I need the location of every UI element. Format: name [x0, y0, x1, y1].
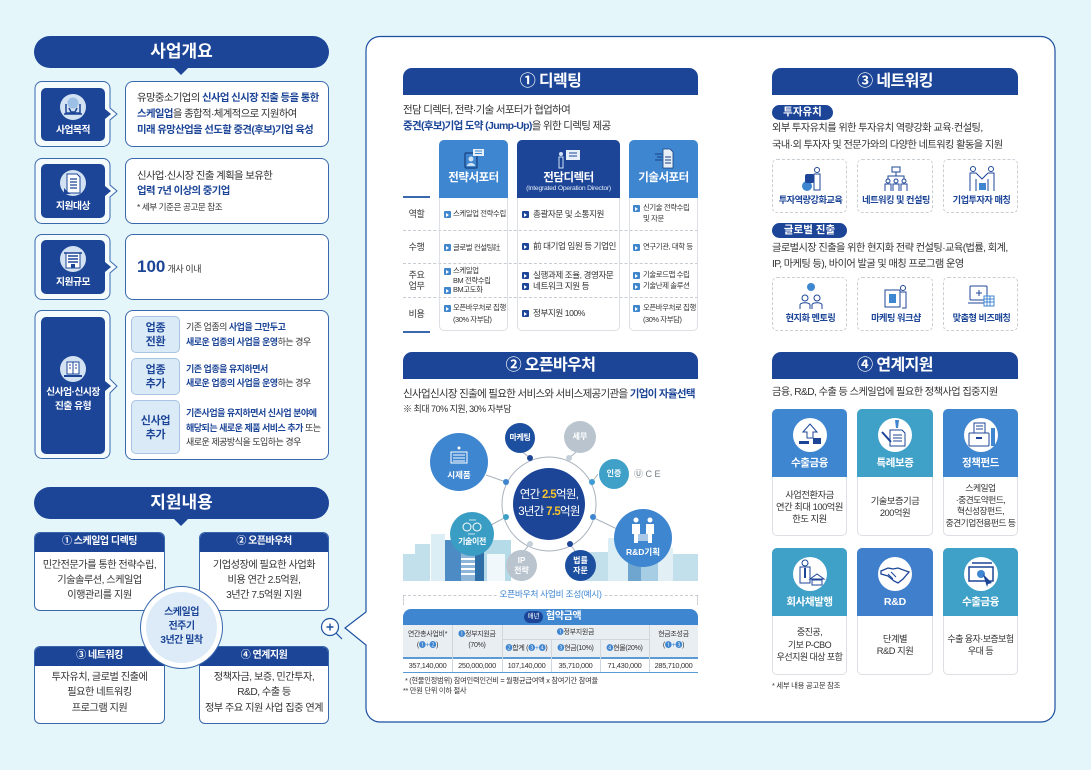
bubble: 기술이전 [450, 512, 494, 556]
table: 협약금액: (❶+❸) [663, 642, 684, 649]
table: 협약금액: ❷합계 (❸+❹) [506, 645, 547, 652]
card: 정책펀드: 중견기업전용펀드 등 [946, 518, 1015, 528]
table: 협약금액: 107,140,000 [508, 661, 545, 670]
table: 디렉팅 row labels: 주요 [409, 270, 424, 280]
bubble: 법률자문 [565, 550, 596, 581]
panel: 사업목적: 미래 유망산업을 선도할 중견(후보)기업 육성 [137, 125, 313, 136]
card: 맞춤형 비즈매칭: 맞춤형 비즈매칭 [953, 313, 1010, 323]
text: table notes: ** 만원 단위 이하 절사 [403, 686, 466, 695]
column: 전담디렉터: 前 대기업 임원 등 기업인 [533, 241, 616, 251]
panel: 신사업·신시장 진출 유형: 신사업·신시장 [46, 387, 100, 398]
column: 전담디렉터: (Integrated Operation Director) [526, 185, 611, 192]
card: 수출금융 (2): 우대 등 [968, 646, 993, 656]
card: 스케일업 디렉팅: 기술솔루션, 스케일업 [57, 575, 142, 586]
bubble: 시제품: 시제품 [447, 470, 471, 480]
heading: 지원내용: 지원내용 [150, 493, 213, 512]
card: R&D: 단계별 [883, 634, 907, 644]
table: 협약금액 [403, 609, 698, 673]
center bubble: 연간 2.5억원 3년간 7.5억원: 3년간 7.5억원 [518, 506, 580, 518]
panel: 지원대상: 지원대상 [56, 201, 90, 212]
bubble: 세무 [564, 421, 596, 453]
icon: certification marks: Ⓤ C E [634, 469, 661, 479]
tag: 글로벌 진출 [772, 223, 847, 238]
column: 전담디렉터: 전담디렉터 [543, 172, 594, 184]
card: 수출금융 (2): 수출 융자·보증보험 [947, 634, 1014, 644]
table: 디렉팅 row labels [403, 196, 430, 333]
heading: 지원내용 [34, 487, 329, 519]
text: 오픈바우처 intro: ※ 최대 70% 지원, 30% 자부담 [403, 404, 511, 414]
text: 글로벌 진출 description: IP, 마케팅 등), 바이어 발굴 및 매칭 프로그램 운영 [772, 259, 964, 270]
table: 협약금액: ❸현금(10%) [557, 645, 594, 652]
center circle: 스케일업 전주기 3년간 밀착: 전주기 [168, 621, 195, 632]
card: 특례보증 [857, 409, 933, 536]
dividers [403, 230, 698, 231]
section 1: 디렉팅 heading [403, 68, 698, 95]
card: 수출금융 (2): 수출금융 [962, 596, 999, 608]
bubble: 기술이전: 기술이전 [458, 537, 486, 546]
section 4: 연계지원 heading: ④ 연계지원 [857, 357, 933, 374]
center circle: 스케일업 전주기 3년간 밀착 [140, 586, 223, 669]
card: 정책펀드: 혁신성장펀드, [957, 506, 1004, 516]
card: 특례보증: 기술보증기금 [871, 496, 919, 506]
card: 회사채발행: 중진공, [797, 627, 822, 637]
section 4: 연계지원 heading [772, 352, 1018, 379]
column: 전략서포터: 오픈바우처로 집행 [453, 303, 506, 312]
column: 전략서포터 [439, 140, 508, 331]
card: 수출금융 [772, 409, 847, 536]
card: 스케일업 디렉팅: ① 스케일업 디렉팅 [62, 536, 137, 547]
table: 협약금액: ❶정부지원금 [557, 629, 594, 636]
panel: 신사업·신시장 진출 유형: 업종 [146, 322, 165, 334]
bubble: 인증: 인증 [607, 469, 621, 478]
heading: 사업개요 [34, 36, 329, 68]
bubble: R&D기획: R&D기획 [626, 547, 660, 557]
section 1: 디렉팅 heading: ① 디렉팅 [520, 73, 581, 90]
card: 마케팅 워크샵 [857, 277, 933, 331]
column: 전담디렉터 [517, 140, 620, 331]
column: 전담디렉터: 실행과제 조율, 경영자문 [533, 270, 613, 280]
column: 전담디렉터: 총괄자문 및 소통지원 [533, 209, 604, 219]
heading: 사업개요: 사업개요 [150, 42, 213, 61]
panel: 신사업·신시장 진출 유형: 새로운 업종의 사업을 운영하는 경우 [186, 337, 311, 347]
card: 오픈바우처: 비용 연간 2.5억원, [228, 575, 300, 586]
text: 투자유치 description: 국내·외 투자자 및 전문가와의 다양한 네트워킹 활동을 지원 [772, 140, 1003, 151]
card: 특례보증: 특례보증 [876, 457, 914, 469]
card: 기업투자자 매칭: 기업투자자 매칭 [953, 195, 1010, 205]
panel: 사업목적 [34, 81, 329, 147]
card: 정책펀드: 정책펀드 [962, 457, 999, 469]
column: 전략서포터: 스케일업 전략수립 [453, 209, 506, 218]
column: 기술서포터: 연구기관, 대학 등 [643, 242, 693, 251]
center circle: 스케일업 전주기 3년간 밀착: 스케일업 [164, 607, 199, 618]
column: 전략서포터: 전략서포터 [448, 172, 499, 184]
text: 투자유치 description [772, 122, 1003, 151]
text: 오픈바우처 intro [403, 388, 695, 414]
text: footnote: * 세부 내용 공고문 참조 [772, 681, 840, 690]
card: 스케일업 디렉팅: 민간전문가를 통한 전략수립, [43, 560, 156, 571]
text: 글로벌 진출 description: 글로벌시장 진출을 위한 현지화 전략 컨설팅·교육(법률, 회계, [772, 243, 1008, 254]
panel: 신사업·신시장 진출 유형: 새로운 제공방식을 도입하는 경우 [186, 437, 301, 447]
column: 기술서포터: 및 자문 [643, 214, 664, 223]
card: 오픈바우처 [199, 532, 329, 611]
text: 오픈바우처 intro: 신사업신시장 진출에 필요한 서비스와 서비스제공기관을 기업이 자율선택 [403, 388, 695, 400]
card: 특례보증: 200억원 [880, 508, 910, 518]
tag: 글로벌 진출: 글로벌 진출 [784, 224, 835, 236]
column: 기술서포터: 신기술 전략수립 [643, 203, 689, 212]
text: table notes [403, 676, 598, 695]
bubble: IP 전략: IP [518, 556, 525, 565]
card: 마케팅 워크샵: 마케팅 워크샵 [871, 313, 921, 323]
card: 회사채발행: 회사채발행 [786, 596, 833, 608]
column: 기술서포터: (30% 자부담) [643, 315, 682, 324]
center circle: 스케일업 전주기 3년간 밀착: 3년간 밀착 [160, 635, 203, 646]
panel: 지원대상 [34, 158, 329, 224]
column: 기술서포터 [629, 140, 698, 331]
table: 협약금액: 357,140,000 [409, 661, 446, 670]
column: 기술서포터: 기술서포터 [638, 172, 689, 184]
panel: 신사업·신시장 진출 유형: 해당되는 새로운 제품 서비스 추가 또는 [186, 423, 320, 433]
text: 연계지원 intro: 금융, R&D, 수출 등 스케일업에 필요한 정책사업 집중지원 [772, 387, 998, 398]
table: 협약금액: 현금조성금 [658, 631, 689, 638]
card: 네트워킹 [34, 646, 165, 724]
card: R&D: R&D 지원 [877, 646, 913, 656]
panel: 사업목적: 유망중소기업의 신사업 신시장 진출 등을 통한 [137, 93, 319, 104]
bubble: IP 전략 [506, 550, 537, 581]
card: 수출금융 (2) [943, 548, 1018, 675]
table: 협약금액: 35,710,000 [558, 661, 592, 670]
card: 네트워킹: 투자유치, 글로벌 진출에 [52, 672, 147, 683]
card: 수출금융: 한도 지원 [792, 514, 827, 524]
panel: 지원규모 [34, 234, 329, 300]
section 3: 네트워킹 heading [772, 68, 1018, 95]
table: 디렉팅 row labels: 역할 [409, 209, 424, 219]
text: 투자유치 description: 외부 투자유치를 위한 투자유치 역량강화 교육·컨설팅, [772, 123, 983, 134]
panel: 신사업·신시장 진출 유형 [34, 310, 329, 460]
text: 디렉팅 intro: 전담 디렉터, 전략·기술 서포터가 협업하여 [403, 104, 570, 116]
panel: 지원규모: 100 개사 이내 [137, 257, 201, 276]
card: 기업투자자 매칭 [943, 159, 1018, 213]
card: 수출금융: 연간 최대 100억원 [776, 502, 843, 512]
table heading: 오픈바우처 사업비 조성(예시) [403, 589, 698, 605]
card: 회사채발행: 기보 P-CBO [788, 640, 831, 650]
panel: 신사업·신시장 진출 유형: 전환 [146, 336, 165, 348]
table: 협약금액: (❶+❷) [417, 642, 438, 649]
card: 수출금융: 사업전환자금 [785, 490, 834, 500]
panel: 지원대상: * 세부 기준은 공고문 참조 [137, 202, 222, 212]
panel: 지원규모: 지원규모 [56, 277, 90, 288]
bubble: R&D기획 [614, 509, 672, 567]
panel: 지원대상: 신사업·신시장 진출 계획을 보유한 [137, 171, 272, 182]
table: 협약금액: 285,710,000 [655, 661, 692, 670]
table: 협약금액: 71,430,000 [608, 661, 642, 670]
column: 기술서포터: 오픈바우처로 집행 [643, 303, 696, 312]
table: 협약금액: 매년 [528, 613, 539, 620]
bubble: IP 전략: 전략 [514, 566, 529, 575]
card: 정책펀드: 스케일업 [965, 483, 996, 493]
card: 연계지원: 정책자금, 보증, 민간투자, [214, 672, 314, 683]
panel: 지원대상: 업력 7년 이상의 중기업 [137, 186, 230, 197]
bubble: 법률자문: 자문 [573, 566, 588, 575]
card: 네트워킹 및 컨설팅 [857, 159, 933, 213]
text: 디렉팅 intro [403, 104, 611, 132]
table: 디렉팅 row labels: 업무 [409, 281, 424, 291]
bubble: 인증 [599, 459, 629, 489]
panel: 신사업·신시장 진출 유형: 신사업 [141, 415, 170, 427]
card: 연계지원: ④ 연계지원 [241, 650, 287, 661]
card: 회사채발행 [772, 548, 847, 675]
center bubble: 연간 2.5억원 3년간 7.5억원 [513, 468, 585, 540]
panel: 신사업·신시장 진출 유형: 기존 업종을 유지하면서 [186, 364, 268, 374]
column: 전략서포터: (30% 자부담) [453, 315, 492, 324]
section 2: 오픈바우처 heading: ② 오픈바우처 [506, 357, 595, 374]
card: R&D: R&D [884, 596, 906, 608]
card: 연계지원: 정부 주요 지원 사업 집중 연계 [205, 703, 323, 714]
panel: 신사업·신시장 진출 유형: 새로운 업종의 사업을 운영하는 경우 [186, 378, 311, 388]
table: 협약금액: 250,000,000 [458, 661, 496, 670]
card: 스케일업 디렉팅 [34, 532, 165, 611]
bubble: 마케팅 [505, 423, 535, 453]
column: 전담디렉터: 네트워크 지원 등 [533, 281, 589, 291]
card: 네트워킹: 필요한 네트워킹 [67, 687, 132, 698]
tag: 투자유치 [772, 105, 833, 120]
card: 현지화 멘토링: 현지화 멘토링 [786, 313, 835, 323]
card: 네트워킹: ③ 네트워킹 [76, 650, 123, 661]
text: 디렉팅 intro: 중견(후보)기업 도약 (Jump-Up)을 위한 디렉팅 제공 [403, 120, 611, 132]
column: 전략서포터: 스케일업 [453, 266, 479, 275]
card: 연계지원: R&D, 수출 등 [237, 687, 291, 698]
section 2: 오픈바우처 heading [403, 352, 698, 379]
card: 회사채발행: 우선지원 대상 포함 [777, 652, 842, 662]
column: 기술서포터: 기술로드맵 수립 [643, 270, 689, 279]
panel: 신사업·신시장 진출 유형: 진출 유형 [55, 401, 91, 412]
table heading: 오픈바우처 사업비 조성(예시): 오픈바우처 사업비 조성(예시) [499, 589, 602, 599]
card: 네트워킹: 프로그램 지원 [72, 703, 127, 714]
card: 스케일업 디렉팅: 이행관리를 지원 [67, 590, 132, 601]
column: 전략서포터: 글로벌 컨설팅社 [453, 243, 500, 252]
panel: 신사업·신시장 진출 유형: 업종 [146, 364, 165, 376]
column: 기술서포터: 기술난제 솔루션 [643, 281, 689, 290]
table: 협약금액: ❶정부지원금 [458, 631, 496, 638]
table: 협약금액: ❹현물(20%) [606, 645, 643, 652]
card: 연계지원 [199, 646, 329, 724]
text: 글로벌 진출 description [772, 242, 1008, 270]
panel: 신사업·신시장 진출 유형: 기존 업종의 사업을 그만두고 [186, 322, 285, 332]
table: 디렉팅 row labels: 수행 [409, 242, 424, 252]
column: 전략서포터: BM고도화 [453, 285, 482, 294]
bubble: 세무: 세무 [573, 432, 587, 441]
card: 정책펀드 [943, 409, 1018, 536]
card: 맞춤형 비즈매칭 [943, 277, 1018, 331]
table: 협약금액: (70%) [468, 642, 486, 649]
panel: 사업목적: 스케일업을 종합적·체계적으로 지원하여 [137, 109, 297, 120]
section 3: 네트워킹 heading: ③ 네트워킹 [857, 73, 933, 90]
tag: 투자유치: 투자유치 [783, 106, 822, 118]
table: 협약금액: 연간총사업비* [408, 631, 447, 638]
bubble: 마케팅: 마케팅 [510, 433, 530, 442]
card: 정책펀드: ·중견도약펀드, [956, 495, 1005, 505]
column: 전담디렉터: 정부지원 100% [533, 308, 585, 318]
panel: 신사업·신시장 진출 유형: 추가 [146, 429, 165, 441]
table: 협약금액: 협약금액 [546, 611, 581, 622]
bubble: 시제품 [430, 433, 488, 491]
card: 오픈바우처: ② 오픈바우처 [236, 536, 292, 547]
card: 수출금융: 수출금융 [791, 457, 828, 469]
icon: magnifier [320, 618, 342, 640]
bubble: 법률자문: 법률 [573, 556, 588, 565]
card: 네트워킹 및 컨설팅: 네트워킹 및 컨설팅 [862, 195, 930, 205]
card: 현지화 멘토링 [772, 277, 847, 331]
card: 오픈바우처: 기업성장에 필요한 사업화 [213, 560, 315, 571]
table: 디렉팅 row labels: 비용 [409, 309, 424, 319]
illustration: city skyline [403, 534, 698, 581]
card: R&D [857, 548, 933, 675]
center bubble: 연간 2.5억원 3년간 7.5억원: 연간 2.5억원, [520, 489, 578, 501]
card: 투자역량강화교육: 투자역량강화교육 [779, 195, 842, 205]
text: table notes: * (현물인정범위) 참여인력인건비 = 월평균급여액 x 참여기간 참여율 [405, 676, 598, 685]
card: 투자역량강화교육 [772, 159, 847, 213]
card: 오픈바우처: 3년간 7.5억원 지원 [226, 590, 302, 601]
panel: 신사업·신시장 진출 유형: 추가 [146, 378, 165, 390]
panel: 사업목적: 사업목적 [56, 125, 90, 136]
panel: 신사업·신시장 진출 유형: 기존사업을 유지하면서 신사업 분야에 [186, 408, 316, 418]
diagram: ring and dots [486, 452, 616, 552]
column: 전략서포터: BM 전략수립 [453, 276, 491, 285]
